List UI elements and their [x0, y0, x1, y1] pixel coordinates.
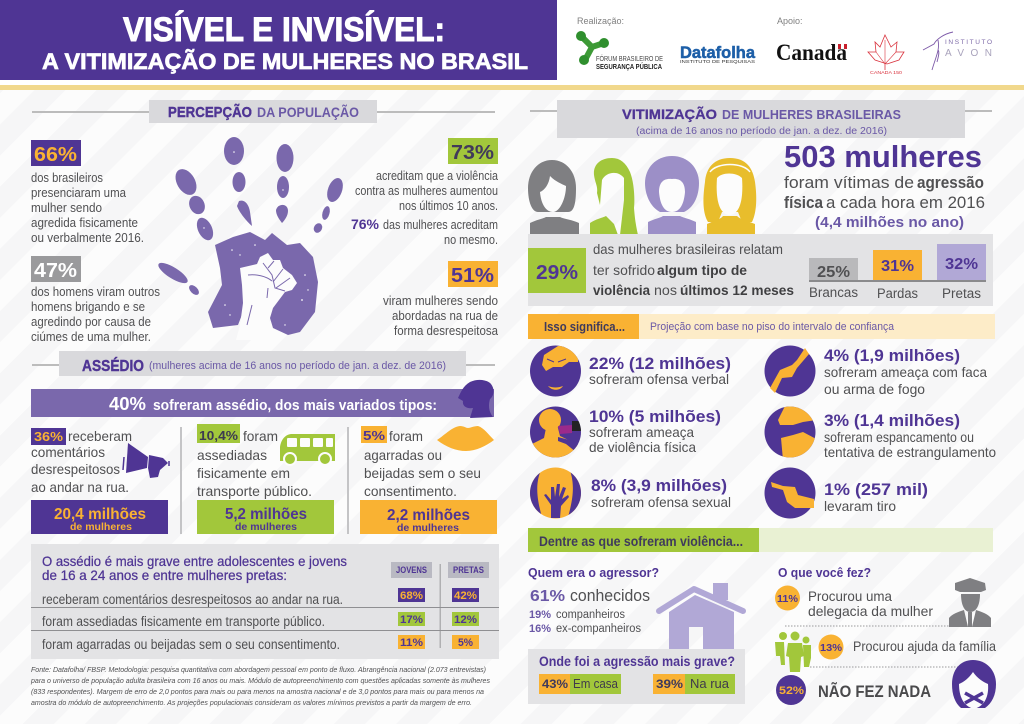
stat: 47%: homens brigando e se — [31, 299, 145, 314]
row: comentários: 42% — [454, 590, 477, 602]
heading: vitimização: VITIMIZAÇÃO — [622, 105, 717, 122]
column: 5% agarradas — [360, 426, 497, 534]
bar chart: raça: Pretas — [942, 286, 981, 301]
icon: woman with taped mouth — [952, 660, 996, 709]
stat: delegacia: 11% — [777, 593, 799, 605]
panel: 29% violência — [528, 234, 993, 306]
title — [42, 11, 528, 74]
panel: onde foi a agressão — [528, 649, 745, 704]
row: agarradas: 11% — [400, 637, 423, 649]
stat: 47%: ciúmes de uma mulher. — [31, 329, 151, 344]
stat: delegacia — [775, 586, 933, 619]
footnote: Fonte: Datafolha/ FBSP. Metodologia: pesquisa quantitativa com abordagem pessoal em ponto de fluxo. Abrangência nacional (2.073 entrevistas) — [31, 665, 486, 674]
box: 5,2 milhões — [197, 500, 334, 534]
icon: family — [775, 632, 811, 672]
stat: 66% — [31, 140, 144, 245]
icon: angry face — [530, 346, 581, 396]
stat: 73%: 76% — [351, 216, 380, 232]
woman: gray — [528, 160, 579, 235]
block: quem era o agressor: Quem era o agressor? — [528, 565, 659, 580]
item: 4% faca ou arma: sofreram ameaça com faca — [824, 364, 987, 380]
column: 10,4% transporte: fisicamente em — [197, 465, 290, 481]
header banner — [0, 0, 557, 80]
text block: das mulheres brasileiras relatam — [593, 241, 783, 257]
heading: assédio: ASSÉDIO — [82, 356, 144, 375]
panel: assédio por grupo — [31, 544, 499, 659]
heading: vitimização: (acima de 16 anos no período de jan. a dez. de 2016) — [636, 126, 887, 137]
bar chart: raça: 31% — [881, 258, 914, 275]
stat: 47%: dos homens viram outros — [31, 284, 160, 299]
bar chart: raça: 32% — [945, 256, 978, 273]
stat: em casa: Em casa — [573, 676, 619, 691]
panel heading: de 16 a 24 anos e entre mulheres pretas: — [42, 567, 287, 583]
logo: Fórum Brasileiro de Segurança Pública — [576, 31, 663, 71]
stat: em casa — [539, 674, 621, 694]
row: agarradas — [42, 635, 479, 652]
logo: Instituto Avon: INSTITUTO — [945, 39, 992, 46]
logo: Fórum Brasileiro de Segurança Pública: SEGURANÇA PÚBLICA — [596, 62, 662, 71]
stat: na rua — [653, 674, 735, 694]
item: 3% espancamento: tentativa de estrangulamento — [824, 444, 996, 460]
block: o que você fez: O que você fez? — [778, 565, 871, 580]
row: transporte: foram assediadas fisicamente em transporte público. — [42, 614, 325, 629]
column: 5% agarradas: consentimento. — [364, 483, 457, 499]
item: 22% ofensa verbal: sofreram ofensa verbal — [589, 371, 729, 387]
headline: 503 mulheres: a cada hora em 2016 — [826, 193, 985, 212]
item: 4% faca ou arma: ou arma de fogo — [824, 381, 925, 397]
headline: 503 mulheres: física — [784, 193, 823, 212]
stat: 73% — [351, 138, 499, 247]
stat: delegacia: delegacia da mulher — [808, 603, 933, 619]
item: 22% ofensa verbal — [530, 346, 731, 396]
stat: na rua: 39% — [656, 677, 683, 691]
block: quem era o agressor: 19% — [529, 609, 551, 621]
icon: arm with weapon — [764, 346, 816, 396]
logo: Canada 150: CANADA 150 — [870, 70, 903, 75]
headline: 503 mulheres — [784, 139, 985, 231]
stat: 66%: agredida fisicamente — [31, 215, 138, 230]
headline: 503 mulheres: foram vítimas de — [784, 173, 914, 192]
item: 10% ameaça física — [530, 406, 721, 462]
footnote — [30, 665, 490, 707]
column: 5% agarradas: 5% — [363, 428, 386, 443]
column: 10,4% transporte: 10,4% — [199, 428, 238, 443]
logo: Instituto Avon — [923, 32, 992, 70]
stat: 47% — [31, 256, 160, 344]
icon: house — [659, 583, 743, 649]
stat: 51%: 51% — [451, 265, 494, 287]
stat: 66%: ou verbalmente 2016. — [31, 230, 144, 245]
logos: realização: Realização: — [577, 16, 624, 26]
logo: Canada 150 — [868, 35, 904, 75]
stat: não fez nada: 52% — [779, 685, 804, 697]
item: 22% ofensa verbal: 22% (12 milhões) — [589, 354, 731, 373]
item: 8% ofensa sexual: sofreram ofensa sexual — [591, 494, 731, 510]
bar chart: raça — [809, 244, 986, 301]
column: 36% comentários: receberam — [68, 428, 132, 444]
stat: família: 13% — [820, 642, 843, 654]
item: 3% espancamento: sofreram espancamento ou — [824, 429, 974, 445]
column: 10,4% transporte: foram — [243, 428, 278, 444]
stat: 51%: viram mulheres sendo — [383, 293, 498, 308]
stat: delegacia: Procurou uma — [808, 588, 892, 604]
box: 5,2 milhões: 5,2 milhões — [225, 506, 307, 523]
icon: four women — [528, 156, 756, 235]
box: 2,2 milhões: 2,2 milhões — [387, 507, 470, 524]
column: 36% comentários: ao andar na rua. — [31, 479, 129, 495]
bar chart: raça: 25% — [817, 264, 850, 281]
icon: threatening hand — [530, 406, 581, 458]
banner: isso significa: Isso significa... — [544, 320, 625, 334]
block: quem era o agressor: 16% — [529, 623, 551, 635]
logo: Instituto Avon: AVON — [945, 48, 992, 59]
stat: 73%: 73% — [451, 142, 494, 164]
text block: violência — [593, 282, 650, 298]
stat: 73%: nos últimos 10 anos. — [399, 198, 498, 213]
row: comentários — [42, 588, 479, 607]
icon: woman head — [458, 380, 494, 418]
text block: ter sofrido — [593, 262, 655, 278]
column: 10,4% transporte: transporte público. — [197, 483, 312, 499]
stat: em casa: 43% — [542, 677, 568, 691]
stat: 73%: acreditam que a violência — [376, 168, 499, 183]
item: 8% ofensa sexual — [525, 468, 731, 520]
logo: Datafolha: INSTITUTO DE PESQUISAS — [680, 59, 755, 64]
column: 36% comentários — [31, 428, 169, 534]
stat: na rua: Na rua — [690, 676, 730, 691]
woman: purple afro — [645, 156, 699, 235]
text block: últimos 12 meses — [680, 282, 794, 298]
logos: apoio: Apoio: — [777, 16, 803, 26]
box: 5,2 milhões: de mulheres — [235, 522, 297, 533]
heading: percepção da população: DA POPULAÇÃO — [257, 105, 359, 120]
stat: família — [818, 634, 996, 660]
block: quem era o agressor: 61% — [530, 588, 565, 605]
table headers: PRETAS — [453, 565, 484, 576]
heading: percepção da população: PERCEPÇÃO — [168, 103, 252, 121]
panel: onde foi a agressão: Onde foi a agressão mais grave? — [539, 654, 735, 669]
bar chart: raça: Brancas — [809, 285, 858, 300]
banner: 40% sofreram assédio: 40% — [109, 394, 146, 414]
item: 1% tiro — [764, 468, 928, 518]
column: 36% comentários: 36% — [34, 429, 63, 444]
headline: 503 mulheres: (4,4 milhões no ano) — [815, 214, 964, 231]
stat: 66%: 66% — [34, 144, 77, 166]
panel heading — [42, 553, 347, 583]
stat: 51%: forma desrespeitosa — [394, 323, 499, 338]
item: 4% faca ou arma: 4% (1,9 milhões) — [824, 346, 960, 365]
logo: Datafolha: Datafolha — [680, 43, 756, 62]
banner: 40% sofreram assédio: sofreram assédio, dos mais variados tipos: — [153, 398, 437, 414]
column: 5% agarradas: agarradas ou — [364, 447, 442, 463]
banner: 40% sofreram assédio — [31, 380, 494, 418]
stat: 47%: 47% — [34, 260, 77, 282]
table headers — [391, 562, 489, 578]
box: 20,4 milhões: de mulheres — [70, 522, 132, 533]
footnote: para o universo de população adulta brasileira com 16 anos ou mais. Módulo de autopreenchimento com questões aplicadas somente às mulheres — [30, 676, 490, 685]
row: comentários: 68% — [400, 590, 423, 602]
stat: 47%: agredindo por causa de — [31, 314, 151, 329]
stat: 66%: presenciaram uma — [31, 185, 127, 200]
heading: assédio — [32, 351, 495, 376]
stat: 66%: mulher sendo — [31, 200, 102, 215]
item: 8% ofensa sexual: 8% (3,9 milhões) — [591, 476, 727, 495]
column: 36% comentários: desrespeitosos — [31, 461, 120, 477]
icon: handprint with fist — [156, 137, 346, 340]
logos: apoio — [776, 16, 992, 75]
item: 4% faca ou arma — [764, 346, 987, 397]
column: 10,4% transporte — [197, 424, 335, 534]
woman: green — [590, 158, 638, 235]
heading: percepção da população — [32, 100, 495, 123]
woman: yellow — [703, 158, 756, 235]
icon: strangling hands — [764, 406, 816, 458]
stat: 51%: abordadas na rua de — [392, 308, 498, 323]
table headers: JOVENS — [396, 565, 427, 576]
text block: algum tipo de — [657, 262, 747, 278]
title: A VITIMIZAÇÃO DE MULHERES NO BRASIL — [42, 49, 528, 74]
row: transporte: 12% — [454, 614, 477, 626]
banner: dentre as que sofreram violência — [528, 528, 993, 552]
block: quem era o agressor: conhecidos — [570, 586, 650, 605]
logo: Fórum Brasileiro de Segurança Pública: FÓRUM BRASILEIRO DE — [596, 54, 663, 63]
item: 3% espancamento: 3% (1,4 milhões) — [824, 411, 960, 430]
column: 36% comentários: comentários — [31, 444, 105, 460]
item: 1% tiro: levaram tiro — [824, 498, 896, 514]
stat: não fez nada — [776, 675, 931, 705]
stat: 51% — [383, 261, 499, 338]
icon: finger gun — [764, 468, 816, 518]
headline: 503 mulheres: 503 mulheres — [784, 139, 982, 174]
item: 1% tiro: 1% (257 mil) — [824, 480, 928, 499]
block: quem era o agressor: companheiros — [556, 609, 625, 621]
box: 2,2 milhões — [360, 500, 497, 534]
headline: 503 mulheres: agressão — [917, 173, 984, 192]
box: 20,4 milhões — [31, 500, 168, 534]
stat: 66%: dos brasileiros — [31, 170, 103, 185]
column: 10,4% transporte: assediadas — [197, 447, 267, 463]
row: comentários: receberam comentários desrespeitosos ao andar na rua. — [42, 592, 343, 607]
row: transporte — [42, 612, 479, 629]
stat: 73%: contra as mulheres aumentou — [355, 183, 498, 198]
banner: isso significa: Projeção com base no piso do intervalo de confiança — [650, 321, 895, 333]
block: quem era o agressor — [528, 565, 659, 635]
row: transporte: 17% — [400, 614, 423, 626]
icon: megaphone — [123, 443, 169, 478]
icon: police officer — [949, 578, 991, 627]
row: agarradas: 5% — [458, 637, 473, 649]
item: 10% ameaça física: de violência física — [589, 439, 696, 455]
row: agarradas: foram agarradas ou beijadas sem o seu consentimento. — [42, 637, 340, 652]
banner: dentre as que sofreram violência: Dentre as que sofreram violência... — [539, 534, 743, 549]
icon: bus — [280, 434, 335, 465]
item: 10% ameaça física: 10% (5 milhões) — [589, 407, 721, 426]
logos: realização — [576, 16, 756, 71]
text block: nos — [654, 282, 677, 298]
stat: 73%: das mulheres acreditam — [383, 217, 498, 232]
box: 20,4 milhões: 20,4 milhões — [54, 506, 146, 523]
item: 10% ameaça física: sofreram ameaça — [589, 424, 694, 440]
item: 3% espancamento — [764, 405, 996, 460]
banner: isso significa — [528, 314, 995, 339]
footnote: amostra do módulo de autopreenchimento. As projeções populacionais consideram os valores mínimos previstos a partir da margem de erro. — [31, 698, 472, 707]
stat: 73%: no mesmo. — [444, 232, 498, 247]
panel: 29% violência: 29% — [536, 262, 578, 284]
stat: não fez nada: NÃO FEZ NADA — [818, 681, 931, 701]
block: o que você fez — [775, 565, 996, 709]
heading: assédio: (mulheres acima de 16 anos no período de jan. a dez. de 2016) — [149, 360, 446, 372]
block: quem era o agressor: ex-companheiros — [556, 623, 641, 635]
icon: lips — [437, 426, 494, 451]
heading: vitimização — [530, 100, 992, 138]
panel heading: O assédio é mais grave entre adolescentes e jovens — [42, 553, 347, 569]
title: VISÍVEL E INVISÍVEL: — [123, 11, 445, 49]
stat: família: Procurou ajuda da família — [853, 638, 996, 654]
logo: Canada: Canada — [776, 40, 847, 65]
box: 2,2 milhões: de mulheres — [397, 523, 459, 534]
text block — [593, 241, 794, 298]
icon: hand grabbing — [530, 468, 581, 518]
bar chart: raça: Pardas — [877, 286, 918, 301]
footnote: (833 respondentes). Margem de erro de 2,0 pontos para mais ou para menos na amostra nacional e de 3,0 pontos para mais ou para menos na — [31, 687, 484, 696]
heading: vitimização: DE MULHERES BRASILEIRAS — [722, 107, 901, 122]
column: 5% agarradas: foram — [389, 428, 423, 444]
column: 5% agarradas: beijadas sem o seu — [364, 465, 481, 481]
